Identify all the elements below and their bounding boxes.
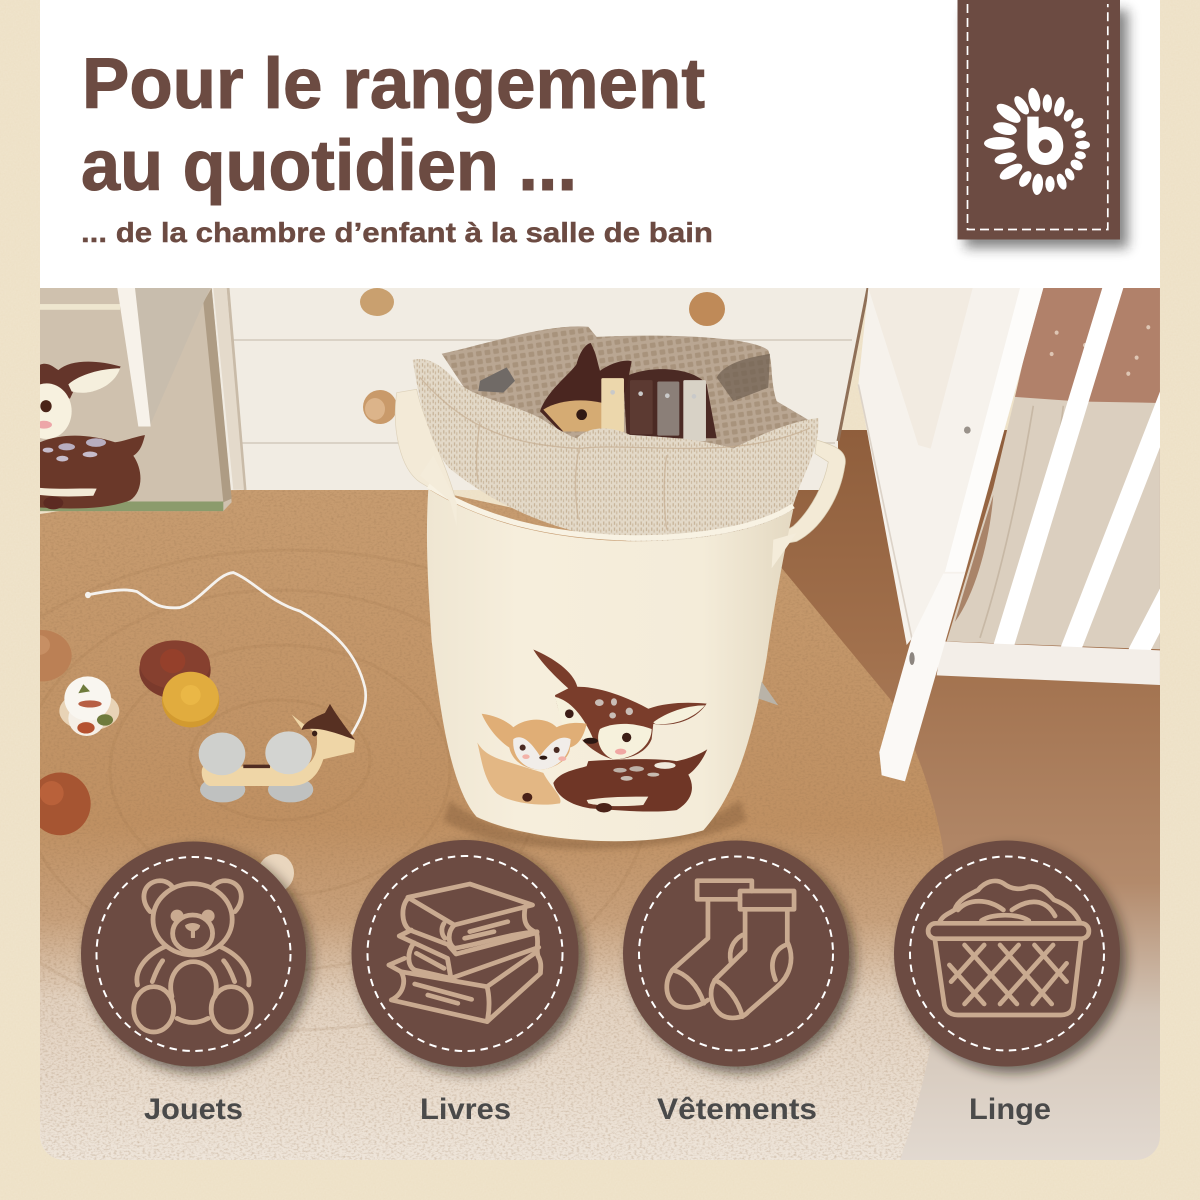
crib side panel [858,288,1043,645]
mother deer body [553,749,707,812]
bag body [427,489,793,841]
left handle [394,389,457,504]
lining folds [420,377,810,530]
crib bottom rail [937,641,1160,685]
photo: nursery scene [0,281,1187,1160]
small toy behind teddy badge [260,854,294,889]
light lining fold [413,359,818,541]
bag top hem [428,486,793,538]
toy box with deer, left [22,288,244,511]
icon: teddy bear [134,881,251,1032]
badge: Vêtements [623,840,855,1073]
crib [858,281,1187,781]
label: Vêtements: Vêtements [657,1093,817,1126]
wood floor [782,430,1160,1160]
crib post [945,288,1043,572]
dark red stacking ring [139,640,211,699]
fawn [477,742,561,805]
rope [85,573,366,734]
brand tag with stitching [958,0,1128,248]
basket shadow [443,800,747,849]
title: au quotidien ... [81,127,577,206]
badge: Jouets [81,842,312,1073]
floor toys [12,573,366,835]
crib flap [868,288,973,449]
subtitle: ... de la chambre d’enfant à la salle de bain [81,217,713,248]
badge: Livres [352,840,585,1074]
dark toy in basket [478,343,770,441]
white dresser [212,288,868,490]
label: Jouets: Jouets [144,1093,243,1126]
mother deer head [533,650,707,759]
terracotta stacking ring [40,630,72,682]
icon: stack of books [389,884,541,1022]
title [81,45,705,206]
drawer knobs [360,288,725,424]
crib bedding [947,288,1160,649]
handle loops [430,484,790,568]
yellow stacking ring [162,672,219,727]
icon: laundry basket [928,881,1089,1015]
badge: Linge [894,840,1126,1073]
rust stacking ring [40,772,91,836]
label: Livres: Livres [420,1093,511,1126]
bag size tag [758,682,778,705]
icon: socks [667,881,794,1018]
storage basket with deer [395,326,845,849]
crib bars [994,288,1160,650]
embroidered deer family [477,650,707,812]
waffle blanket back [442,326,808,448]
crib leg [879,574,965,781]
logo: sunflower b [984,87,1090,195]
right handle [788,440,846,543]
small figure toy [59,676,119,736]
deer face on box [40,362,145,510]
label: Linge: Linge [969,1093,1051,1126]
title: Pour le rangement [82,45,705,124]
header panel [40,0,1160,289]
wooden pull-along deer [199,704,355,802]
jute rug [0,490,950,1160]
